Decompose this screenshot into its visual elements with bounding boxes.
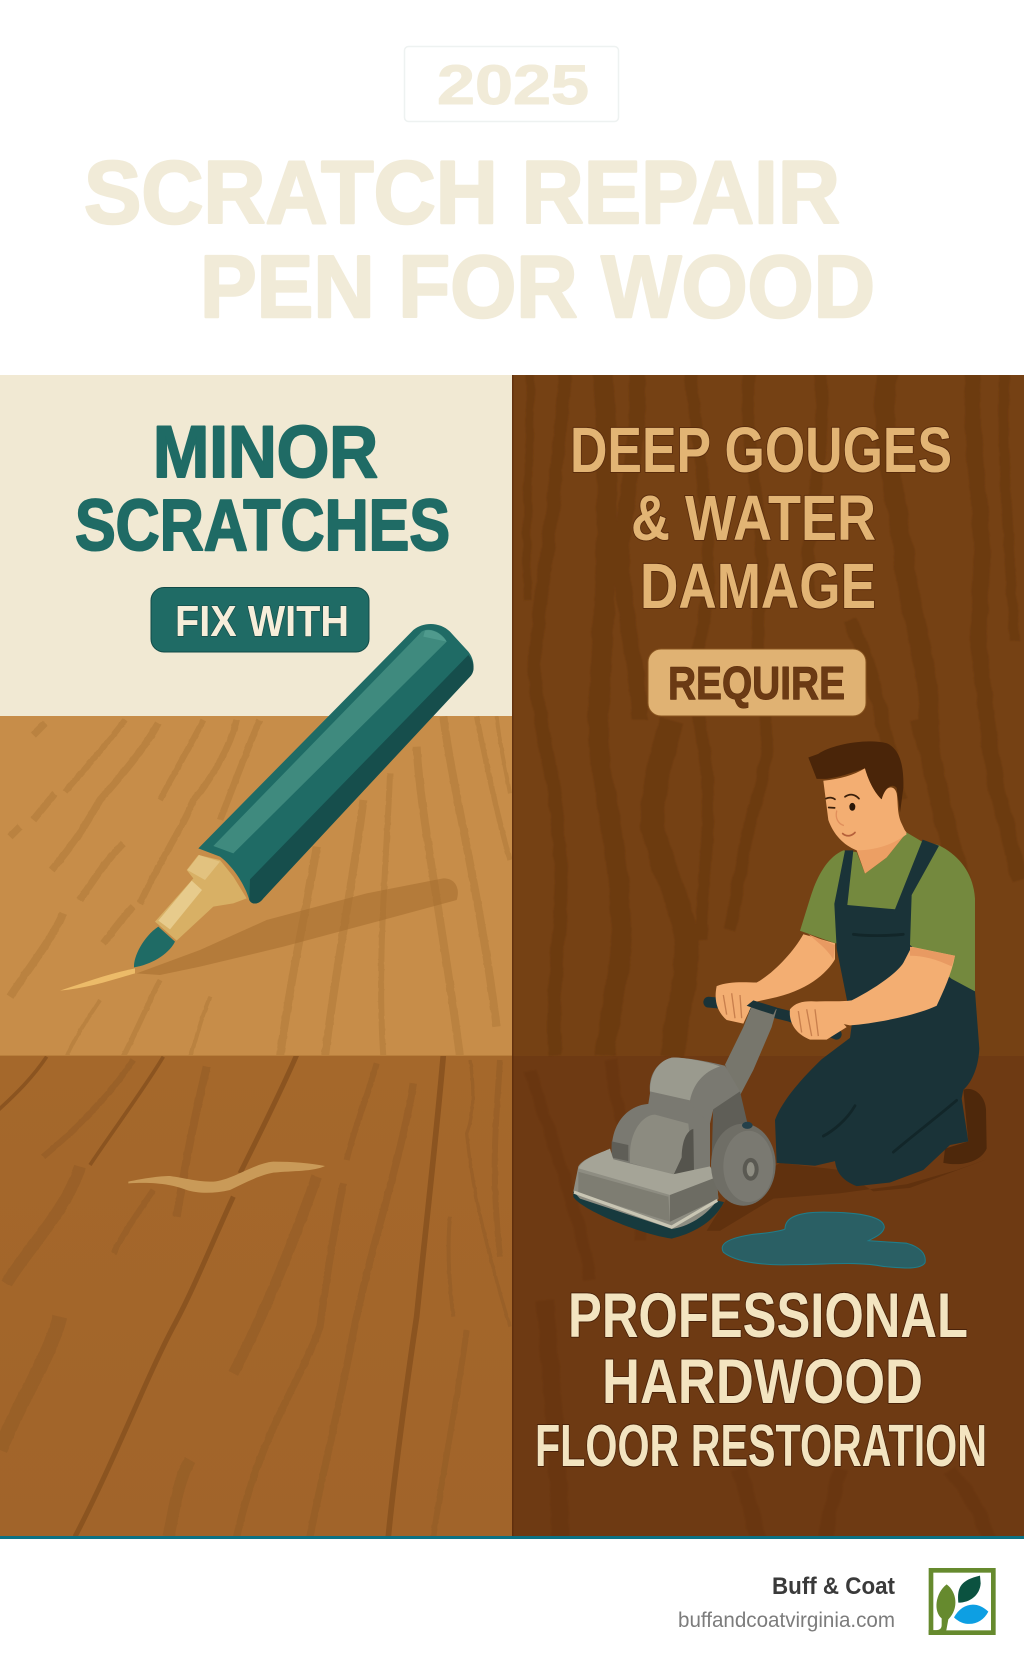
sander machine xyxy=(573,1057,776,1239)
header xyxy=(84,46,875,336)
pen shadow xyxy=(137,878,458,975)
worker overalls xyxy=(775,840,979,1186)
heading: professional hardwood floor restoration: HARDWOOD xyxy=(602,1347,923,1417)
pen body xyxy=(198,624,474,904)
panel: minor scratches xyxy=(0,375,512,1537)
heading: deep gouges and water damage xyxy=(572,426,951,610)
illustration: worker with floor sander xyxy=(573,741,987,1239)
dark wood background xyxy=(512,375,1024,1056)
footer rule xyxy=(0,1536,1024,1539)
title: PEN FOR WOOD xyxy=(200,237,875,336)
heading: minor scratches xyxy=(75,412,450,566)
pen collar xyxy=(155,855,247,941)
scratch on floor xyxy=(128,1162,325,1193)
icon: repair pen xyxy=(134,624,474,967)
water puddle xyxy=(722,1212,925,1268)
light wood plank xyxy=(0,716,512,1057)
worker hair xyxy=(808,741,903,813)
floor shadow xyxy=(707,1163,968,1230)
badge: fix with xyxy=(151,588,369,652)
year badge xyxy=(404,46,618,122)
worker left arm xyxy=(754,934,835,1002)
year badge: 2025 xyxy=(437,53,589,116)
worker facial features xyxy=(826,795,859,836)
wood grain xyxy=(527,365,1020,1056)
heading: minor scratches: SCRATCHES xyxy=(75,486,450,566)
badge: require: REQUIRE xyxy=(668,657,845,709)
heading: professional hardwood floor restoration xyxy=(537,1292,985,1468)
badge: fix with: FIX WITH xyxy=(175,597,349,646)
scratch mark under pen tip xyxy=(60,968,135,991)
title xyxy=(84,142,875,336)
pen tip xyxy=(134,927,175,967)
icon: company logo xyxy=(929,1570,993,1635)
heading: deep gouges and water damage: DAMAGE xyxy=(640,550,876,622)
sander handle bar xyxy=(708,1002,837,1034)
heading: minor scratches: MINOR xyxy=(153,412,378,493)
worker neck and face xyxy=(856,830,906,874)
footer brand text xyxy=(678,1573,895,1632)
heading: deep gouges and water damage: & WATER xyxy=(631,482,876,554)
panel: deep gouges xyxy=(512,365,1024,1540)
worker shirt xyxy=(800,832,975,991)
footer brand text: buffandcoatvirginia.com xyxy=(678,1609,895,1632)
seam between planks xyxy=(0,1055,512,1057)
cream wall xyxy=(0,375,512,716)
footer brand text: Buff & Coat xyxy=(772,1573,895,1600)
worker right arm xyxy=(807,947,955,1025)
dark wood plank xyxy=(0,1055,512,1537)
title: SCRATCH REPAIR xyxy=(84,142,840,242)
badge: require xyxy=(648,649,866,716)
sander pole xyxy=(725,1002,777,1099)
worker shoe xyxy=(943,1089,987,1164)
